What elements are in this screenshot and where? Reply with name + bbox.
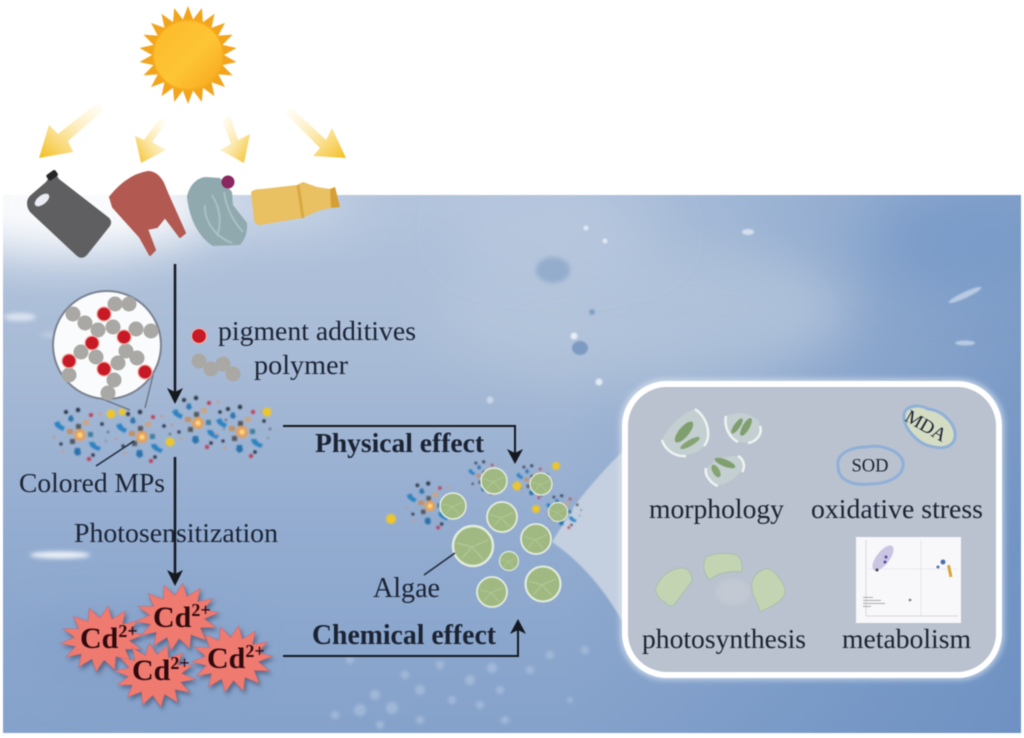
- label: Colored MPs: [19, 441, 165, 498]
- arrow: physical effect path: [283, 426, 523, 464]
- label: Physical effect: Physical effect: [315, 427, 485, 458]
- zoom wedge to panel: [552, 448, 626, 628]
- arrow: plastics to colored MPs: [167, 264, 183, 404]
- icon: MDA blob: MDA: [901, 406, 950, 447]
- label: Algae: [373, 553, 455, 604]
- label: photosynthesis: photosynthesis: [642, 623, 806, 654]
- icon: sunlight arrows: [39, 102, 346, 163]
- Cd2+ ion stars: Cd: [132, 654, 170, 687]
- callout: polymer magnifier: [53, 291, 161, 410]
- icon: SOD blob: SOD: [852, 456, 888, 476]
- Cd2+ ion stars: 2+: [170, 653, 190, 673]
- panel: effects on algae: [620, 379, 1004, 680]
- Cd2+ ion stars: [57, 580, 275, 710]
- algae cluster with attached MPs: [386, 460, 582, 607]
- chart: metabolism score plot: [856, 537, 961, 623]
- label: Chemical effect: Chemical effect: [312, 620, 497, 651]
- label: oxidative stress: oxidative stress: [811, 493, 983, 524]
- Cd2+ ion stars: 2+: [118, 621, 138, 641]
- Cd2+ ion stars: Cd: [207, 642, 245, 675]
- icon: yellow plastic bottle: [251, 182, 340, 225]
- icon: crushed teal bottle: [187, 176, 247, 246]
- water background: [0, 155, 1024, 733]
- arrow: photosensitization: [167, 457, 183, 586]
- colored MPs particles: [53, 396, 271, 463]
- arrow: chemical effect path: [283, 619, 526, 656]
- Cd2+ ion stars: Cd: [153, 601, 191, 634]
- label: Algae: Algae: [373, 573, 440, 604]
- icon: black plastic jug: [27, 169, 111, 258]
- icon: SOD blob: [838, 446, 903, 484]
- label: morphology: morphology: [649, 493, 784, 524]
- icon: red plastic bag: [110, 172, 185, 255]
- legend: pigment additives: pigment additives: [218, 315, 416, 346]
- Cd2+ ion stars: 2+: [245, 641, 265, 661]
- icon: damaged algae cells: [662, 409, 761, 486]
- label: metabolism: metabolism: [842, 623, 971, 654]
- label: Colored MPs: Colored MPs: [19, 467, 165, 498]
- Cd2+ ion stars: 2+: [191, 600, 211, 620]
- icon: chloroplast fragments: [656, 553, 785, 612]
- label: Photosensitization: Photosensitization: [74, 517, 278, 548]
- icon: sun: [139, 6, 237, 104]
- legend: polymer: polymer: [254, 349, 348, 380]
- Cd2+ ion stars: Cd: [80, 622, 118, 655]
- legend: polymer: [192, 349, 348, 382]
